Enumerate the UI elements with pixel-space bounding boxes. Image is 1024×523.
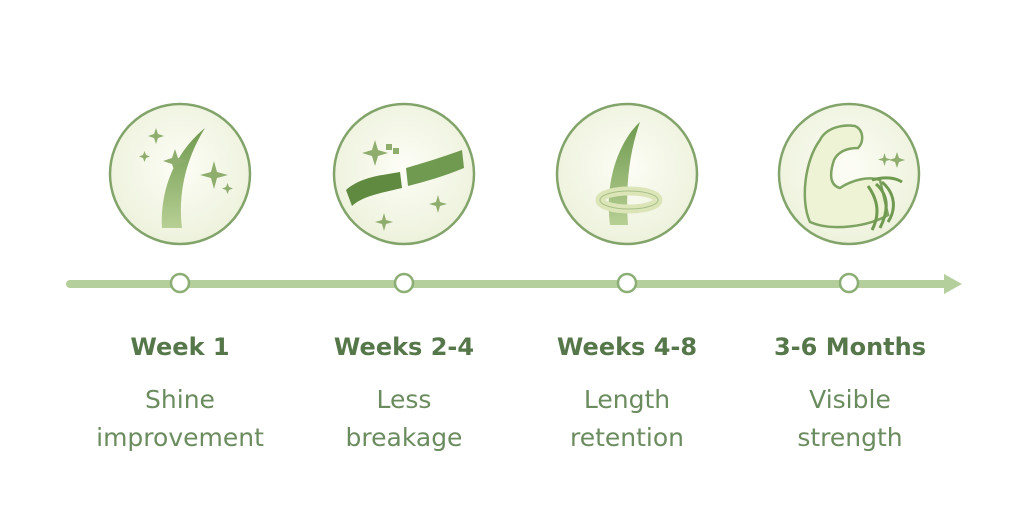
label: weeks 4-8: Length [584,385,670,414]
icon: broken strand [334,104,474,244]
label: week 1 [96,333,264,452]
label: 3-6 months: 3-6 Months [774,333,926,361]
node: weeks 4-8 [618,274,636,292]
icon: shine hair strand [110,104,250,244]
node: week 1 [171,274,189,292]
label: weeks 2-4 [334,333,474,452]
label: weeks 4-8 [557,333,697,452]
label: weeks 2-4: Weeks 2-4 [334,333,474,361]
label: weeks 4-8: Weeks 4-8 [557,333,697,361]
label: 3-6 months: strength [797,423,903,452]
label: weeks 2-4: breakage [346,423,462,452]
label: weeks 2-4: Less [377,385,431,414]
icon: strong arm [779,104,919,244]
label: 3-6 months [774,333,926,452]
node: 3-6 months [840,274,858,292]
label: weeks 4-8: retention [570,423,684,452]
node: weeks 2-4 [395,274,413,292]
label: week 1: Week 1 [130,333,230,361]
timeline arrow [70,274,962,294]
label: 3-6 months: Visible [809,385,891,414]
label: week 1: improvement [96,423,264,452]
icon: length measuring tape [557,104,697,244]
label: week 1: Shine [145,385,215,414]
